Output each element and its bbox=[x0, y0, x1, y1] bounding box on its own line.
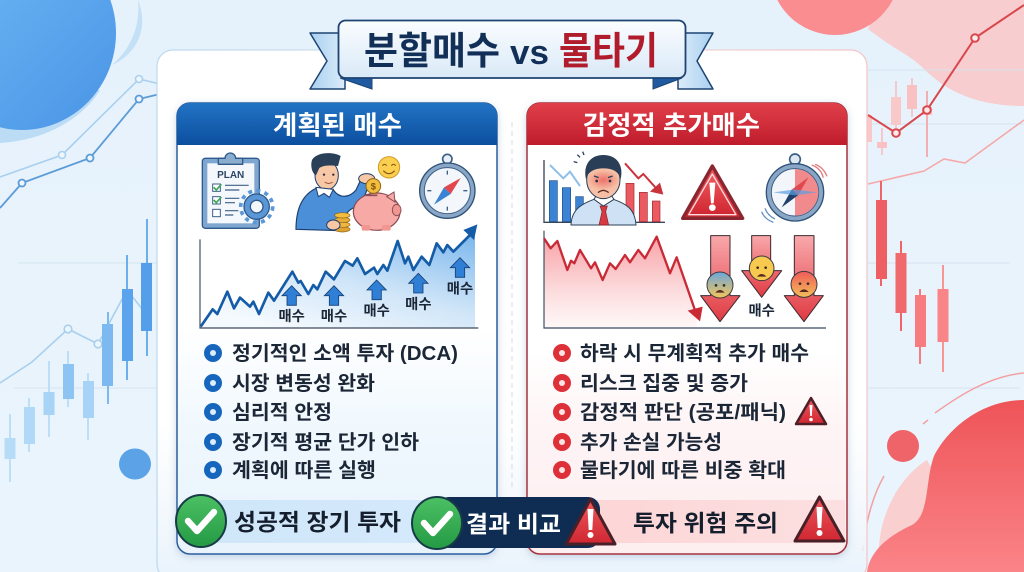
panel header: blue bbox=[177, 103, 497, 145]
icon: warning bbox=[566, 499, 615, 544]
icon: falling arrows with scared faces bbox=[701, 236, 823, 322]
result band: risk: 투자 위험 주의 bbox=[633, 510, 778, 536]
bullet list: planned: 장기적 평균 단가 인하 bbox=[232, 431, 419, 454]
chart: falling line bbox=[544, 231, 826, 328]
buy labels bbox=[278, 281, 473, 325]
panel: emotional averaging down bbox=[527, 103, 847, 554]
heading: planned buying: 계획된 매수 bbox=[273, 110, 402, 140]
icon: green check bbox=[176, 495, 226, 547]
title ribbon bbox=[310, 20, 713, 89]
white card bbox=[157, 50, 867, 572]
bullet list: emotional: 리스크 집중 및 증가 bbox=[580, 372, 748, 395]
icon: plan clipboard with gear bbox=[202, 153, 273, 228]
buy arrows bbox=[282, 258, 470, 305]
bullet list: emotional bbox=[553, 342, 826, 482]
panel header: red bbox=[527, 103, 847, 145]
result compare pill: 결과 비교 bbox=[466, 511, 561, 537]
bullet list: emotional: 물타기에 따른 비중 확대 bbox=[580, 459, 786, 482]
bullet list: emotional: 추가 손실 가능성 bbox=[580, 431, 722, 454]
result band: success bbox=[176, 495, 425, 547]
title text: vs bbox=[510, 34, 549, 72]
bullet list: planned: 계획에 따른 실행 bbox=[232, 459, 376, 482]
bullet list: planned: 정기적인 소액 투자 (DCA) bbox=[232, 342, 458, 365]
icon: green check bbox=[412, 497, 462, 549]
background: red decoration right bbox=[770, 0, 1024, 572]
result band: risk bbox=[590, 497, 845, 543]
buy labels: 매수 bbox=[321, 308, 347, 325]
icon: compass bbox=[420, 154, 475, 218]
icon: spinning compass bbox=[762, 154, 827, 222]
title text: 분할매수 bbox=[364, 31, 500, 73]
icon: investor with piggy bank bbox=[296, 153, 401, 232]
bullet list: planned bbox=[204, 342, 458, 482]
heading: emotional averaging: 감정적 추가매수 bbox=[583, 110, 760, 140]
bullet list: emotional: 하락 시 무계획적 추가 매수 bbox=[580, 342, 809, 365]
buy labels: 매수 bbox=[447, 281, 473, 298]
icon: plan clipboard with gear: PLAN bbox=[217, 170, 244, 181]
buy labels: 매수 bbox=[405, 296, 432, 313]
icon: red candlesticks bbox=[876, 181, 948, 372]
icon: warning bbox=[795, 497, 844, 541]
bullet list: emotional: 감정적 판단 (공포/패닉) bbox=[580, 401, 786, 424]
buy label: 매수 bbox=[748, 303, 775, 320]
background: blue decoration left bbox=[0, 0, 160, 482]
result band: success: 성공적 장기 투자 bbox=[234, 509, 401, 535]
icon: stressed investor with falling bars bbox=[544, 152, 665, 225]
icon: blue candlesticks bbox=[4, 219, 152, 482]
title text: 물타기 bbox=[559, 31, 658, 73]
buy labels: 매수 bbox=[363, 302, 390, 319]
result compare pill bbox=[412, 497, 615, 549]
buy labels: 매수 bbox=[278, 308, 305, 325]
chart: rising line with buy markers bbox=[200, 224, 478, 328]
icon: investor with piggy bank: $ bbox=[371, 181, 377, 191]
bullet list: planned: 시장 변동성 완화 bbox=[232, 372, 375, 395]
bullet list: planned: 심리적 안정 bbox=[232, 401, 332, 424]
divider bbox=[511, 122, 513, 490]
icon: warning triangle bbox=[683, 166, 743, 218]
icon: small warning bbox=[796, 398, 826, 424]
panel: planned buying bbox=[177, 103, 497, 554]
